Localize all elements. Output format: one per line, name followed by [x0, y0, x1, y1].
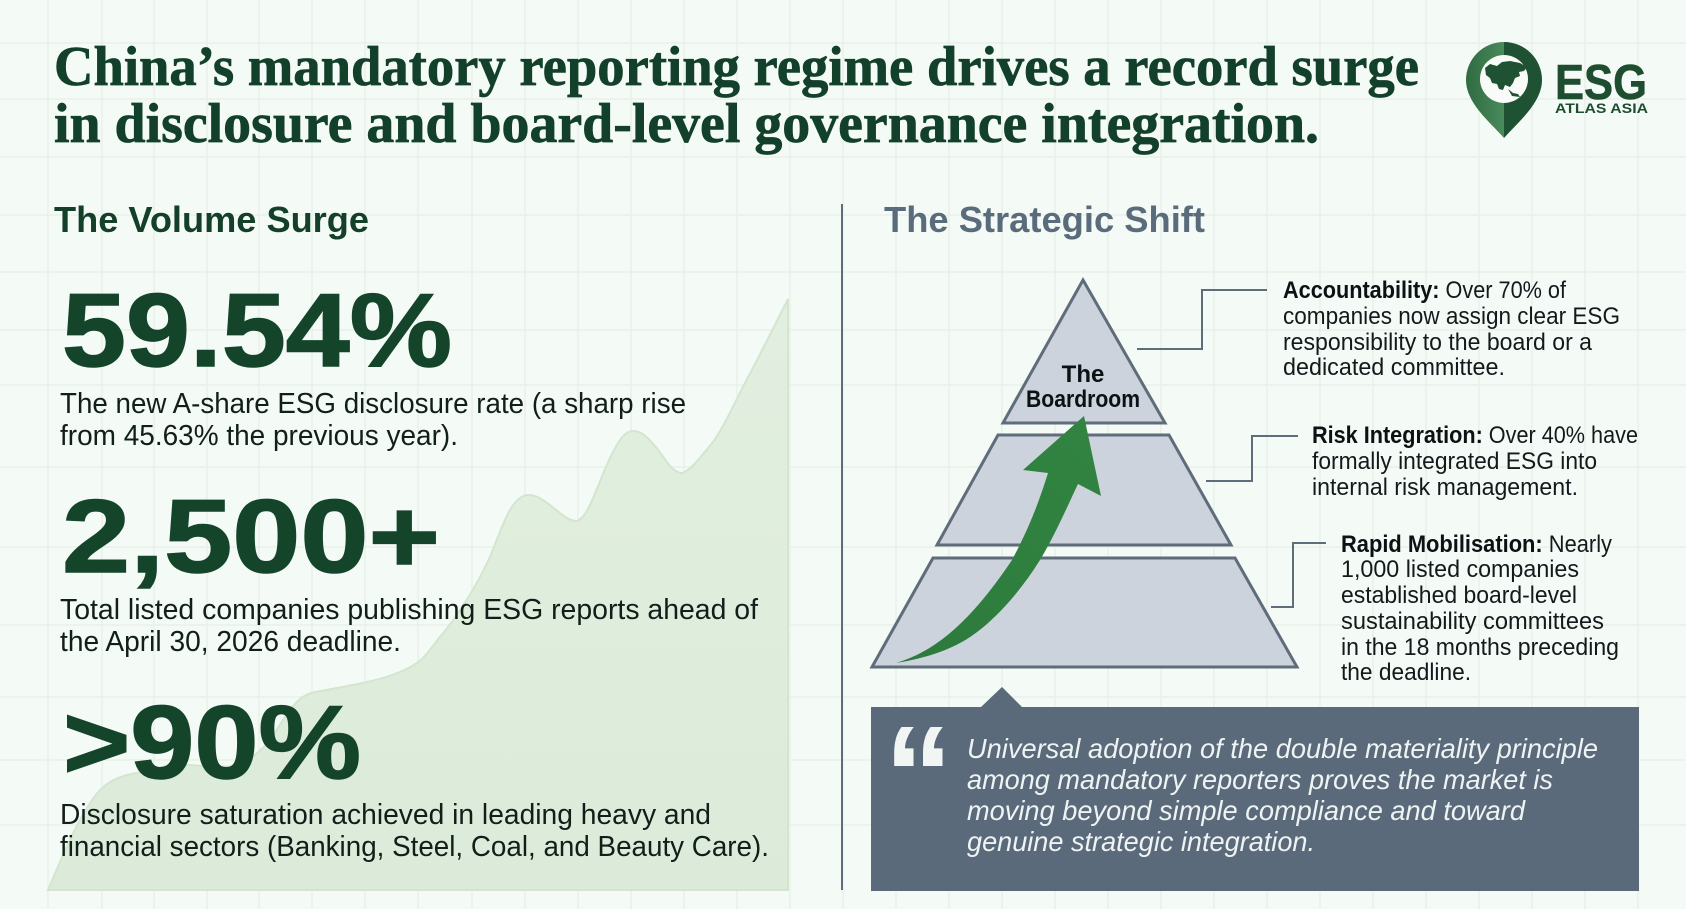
label: the boardroom [1026, 361, 1140, 413]
quote text: Universal adoption of the double materiality principle [967, 733, 1598, 764]
text block: accountability: dedicated committee. [1283, 354, 1505, 381]
divider [841, 204, 843, 890]
text block: accountability: responsibility to the board or a [1283, 329, 1593, 356]
pyramid tier: middle [937, 435, 1231, 545]
text block: rapid mobilisation: established board-level [1341, 582, 1577, 609]
connector: risk integration [1206, 436, 1298, 481]
panel: the volume surge [54, 199, 769, 863]
logo: ESG Atlas Asia [1466, 42, 1648, 138]
text block: accountability: Accountability: Over 70% of [1283, 277, 1566, 304]
logo: ESG Atlas Asia: ESG [1555, 56, 1647, 110]
text block: risk integration: Risk Integration: Over 40% have [1312, 422, 1638, 449]
stat: 59.54% [60, 273, 686, 452]
text block: rapid mobilisation: the deadline. [1341, 659, 1471, 686]
pyramid tier: the boardroom [1003, 280, 1165, 423]
panel: the strategic shift [871, 199, 1639, 891]
heading: the volume surge: The Volume Surge [54, 199, 369, 240]
pyramid [872, 280, 1297, 667]
text block: risk integration [1312, 422, 1638, 501]
arrow: rising to the boardroom [896, 416, 1101, 663]
stat: 2,500+: Total listed companies publishing ESG reports ahead of [60, 594, 759, 626]
quote text [967, 733, 1598, 857]
text block: risk integration: formally integrated ESG into [1312, 448, 1597, 475]
icon: quote mark: “ [884, 698, 953, 852]
stat: 2,500+ [60, 479, 759, 658]
text block: accountability: companies now assign clear ESG [1283, 303, 1620, 330]
stat: >90%: >90% [63, 685, 361, 801]
text block: rapid mobilisation: Rapid Mobilisation: Nearly [1341, 531, 1612, 558]
title [54, 36, 1419, 155]
text block: accountability [1283, 277, 1620, 381]
logo: ESG Atlas Asia: ATLAS ASIA [1555, 100, 1648, 116]
text block: risk integration: internal risk management. [1312, 474, 1578, 501]
text block: rapid mobilisation: in the 18 months preceding [1341, 634, 1619, 661]
heading: the strategic shift: The Strategic Shift [884, 199, 1205, 240]
text block: rapid mobilisation [1341, 531, 1619, 686]
area chart: rising disclosure volume [48, 299, 788, 890]
icon: map pin with Asia [1466, 42, 1542, 138]
stat: >90%: Disclosure saturation achieved in leading heavy and [60, 799, 711, 831]
stat: >90% [60, 685, 769, 863]
text block: rapid mobilisation: sustainability committees [1341, 608, 1604, 635]
callout: double materiality quote [871, 687, 1639, 891]
quote text: genuine strategic integration. [967, 826, 1315, 857]
title: China’s mandatory reporting regime drives a record surge [54, 36, 1419, 98]
pyramid tier: base [872, 558, 1297, 667]
quote text: among mandatory reporters proves the market is [967, 764, 1553, 795]
stat: 59.54%: The new A-share ESG disclosure rate (a sharp rise [60, 388, 686, 420]
title: in disclosure and board-level governance integration. [54, 93, 1319, 155]
stat: 59.54%: 59.54% [62, 273, 452, 389]
stat: 2,500+: 2,500+ [62, 479, 440, 595]
quote text: moving beyond simple compliance and toward [967, 795, 1526, 826]
label: the boardroom: Boardroom [1026, 386, 1140, 413]
stat: 59.54%: from 45.63% the previous year). [60, 420, 458, 452]
text block: rapid mobilisation: 1,000 listed companies [1341, 556, 1579, 583]
stat: 2,500+: the April 30, 2026 deadline. [60, 626, 401, 658]
connector: accountability [1137, 290, 1267, 349]
label: the boardroom: The [1062, 361, 1104, 388]
stat: >90%: financial sectors (Banking, Steel, Coal, and Beauty Care). [60, 831, 769, 863]
connector: rapid mobilisation [1271, 543, 1326, 607]
